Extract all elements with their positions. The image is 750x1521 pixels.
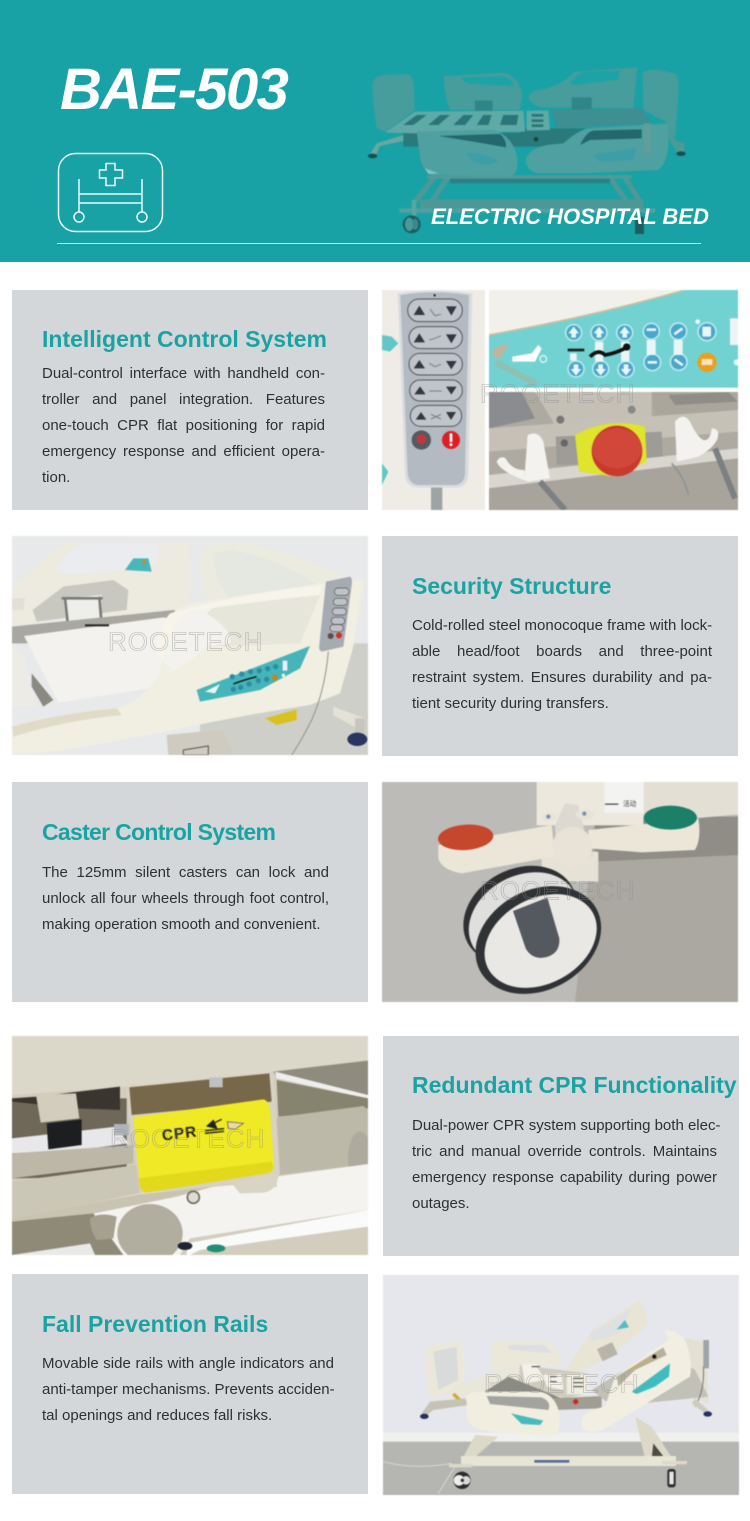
model number title: BAE-503 [60, 57, 287, 122]
watermark: ROOETECH [480, 379, 635, 409]
description [42, 1355, 335, 1424]
description: unlock all four wheels through foot control, [42, 890, 329, 907]
heading: Intelligent Control System [42, 326, 327, 352]
header banner [0, 0, 750, 262]
photo: emergency stop button [488, 391, 739, 511]
watermark: ROOETECH [110, 1124, 265, 1154]
description: tient security during transfers. [412, 695, 609, 712]
hospital bed product image [368, 67, 686, 234]
heading: Redundant CPR Functionality [412, 1072, 737, 1098]
watermark: ROOETECH [108, 627, 263, 657]
description: making operation smooth and convenient. [42, 916, 321, 933]
heading: Caster Control System [42, 819, 275, 845]
icon: bed with medical cross [58, 152, 164, 232]
description: tal openings and reduces fall risks. [42, 1407, 272, 1424]
photo: full bed in tilted position [382, 1275, 740, 1496]
photo: caster wheel with pedals [382, 782, 739, 1002]
panel: security structure [382, 536, 738, 756]
description [42, 864, 329, 933]
description: able head/foot boards and three-point [412, 643, 712, 660]
description: tric and manual override controls. Maintains [412, 1143, 717, 1160]
description: tion. [42, 469, 70, 486]
panel: intelligent control system [12, 290, 368, 510]
description: Dual-power CPR system supporting both elec- [412, 1117, 720, 1134]
photo: yellow CPR handle [11, 1036, 369, 1256]
description: Dual-control interface with handheld con- [42, 365, 325, 382]
description: one-touch CPR flat positioning for rapid [42, 417, 325, 434]
photo: side rail with controller [12, 536, 368, 756]
description [412, 1117, 720, 1212]
description: anti-tamper mechanisms. Prevents acciden- [42, 1381, 335, 1398]
description: The 125mm silent casters can lock and [42, 864, 329, 881]
description: outages. [412, 1195, 470, 1212]
description [42, 365, 325, 486]
description: Cold-rolled steel monocoque frame with lock- [412, 617, 712, 634]
description: Movable side rails with angle indicators and [42, 1355, 334, 1372]
panel: redundant CPR functionality [383, 1036, 739, 1256]
photo: yellow CPR handle: CPR [161, 1123, 198, 1145]
heading: Fall Prevention Rails [42, 1311, 268, 1337]
product type caption: ELECTRIC HOSPITAL BED [431, 204, 709, 229]
watermark: ROOETECH [480, 876, 635, 906]
description: emergency response capability during power [412, 1169, 717, 1186]
base is drawn first, behind the rails [415, 175, 640, 202]
photo: bed control panel [488, 289, 739, 388]
watermark: ROOETECH [484, 1369, 639, 1399]
description: troller and panel integration. Features [42, 391, 325, 408]
description: restraint system. Ensures durability and pa- [412, 669, 712, 686]
photo: handheld controller [381, 290, 485, 510]
panel: caster control system [12, 782, 368, 1002]
description: emergency response and efficient opera- [42, 443, 325, 460]
panel: fall prevention rails [12, 1274, 368, 1494]
heading: Security Structure [412, 573, 611, 599]
photo: caster wheel with pedals: 活动 [623, 799, 637, 808]
description [412, 617, 712, 712]
